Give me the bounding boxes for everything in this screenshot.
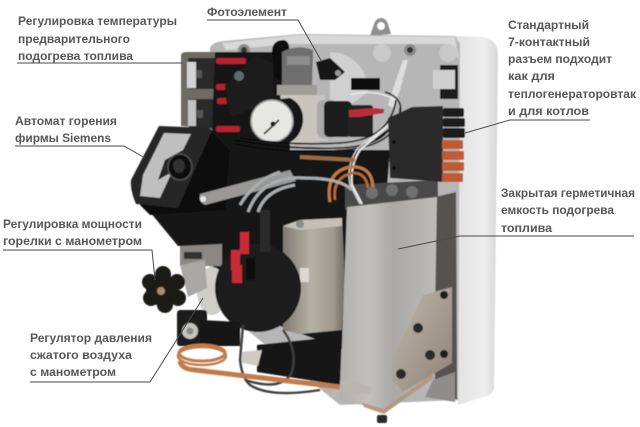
tank foot <box>377 415 387 423</box>
dark gap beside tank <box>435 192 457 400</box>
callout: 7-pin connector: теплогенераторовтак <box>508 87 637 101</box>
solenoid valve <box>225 55 273 117</box>
callout: sealed tank: Закрытая герметичная <box>501 186 635 200</box>
callout: 7-pin connector: как для <box>508 69 555 83</box>
tank bolts <box>366 184 418 199</box>
callout: 7-pin connector: 7-контактный <box>508 35 590 49</box>
upper terminal strip <box>351 78 380 90</box>
callout: sealed tank: топлива <box>501 221 552 235</box>
fuel tank <box>340 184 437 423</box>
left relay bracket <box>181 52 222 130</box>
callout: power regulation: горелки с манометром <box>3 234 142 248</box>
callout: sealed tank <box>398 186 635 249</box>
fuel fitting <box>340 381 372 394</box>
casting rim <box>222 35 459 60</box>
motor <box>283 218 345 334</box>
casting disc <box>330 52 368 120</box>
casting window <box>440 65 458 99</box>
clear tubes <box>240 172 352 212</box>
rear gauge <box>197 267 227 315</box>
tank top shadow <box>345 180 438 210</box>
callout: air pressure regulator <box>30 298 203 382</box>
callout: air pressure regulator: сжатого воздуха <box>30 348 132 362</box>
black base <box>257 336 342 385</box>
photoelement <box>316 58 345 80</box>
adjustment knob <box>142 266 186 313</box>
copper coil <box>178 345 340 387</box>
automat Siemens box <box>131 126 230 215</box>
callout: power regulation <box>3 217 155 280</box>
reset button <box>168 154 192 180</box>
copper pipe fitting <box>300 157 373 202</box>
callout: temperature regulation: предварительного <box>18 32 130 46</box>
device label <box>140 133 191 198</box>
dark mass behind components <box>150 52 390 350</box>
air regulator block <box>177 310 240 346</box>
housing side panel <box>452 36 498 405</box>
relay upper <box>187 58 216 89</box>
red terminals <box>216 58 246 132</box>
callout: air pressure regulator: с манометром <box>30 365 116 379</box>
housing back casting <box>210 34 460 405</box>
callout: temperature regulation <box>17 14 183 63</box>
pressure switch plate <box>215 210 301 332</box>
callout: 7-pin connector: разъем подходит <box>508 52 612 66</box>
pressure regulator <box>277 47 328 145</box>
actuator cylinder <box>317 100 384 138</box>
callout: sealed tank: емкость подогрева <box>501 203 614 217</box>
callout: photoelement: Фотоэлемент <box>207 5 287 19</box>
pressure gauge <box>251 98 303 144</box>
callout: air pressure regulator: Регулятор давления <box>30 331 152 345</box>
insulated gray pipe <box>200 170 296 205</box>
callout: 7-pin connector <box>465 18 637 133</box>
valve stem <box>180 260 207 297</box>
burner photograph <box>131 18 498 423</box>
connector block <box>388 106 465 182</box>
callout: temperature regulation: подогрева топлива <box>18 49 133 63</box>
mounting plate <box>392 287 452 392</box>
callout: photoelement <box>207 5 322 62</box>
cables <box>240 325 320 393</box>
callout: Siemens automat: Автомат горения <box>15 114 117 128</box>
callout: power regulation: Регулировка мощности <box>3 217 142 231</box>
hanging lug <box>370 18 391 36</box>
callout: Siemens automat <box>15 114 145 158</box>
wiring harness <box>235 92 401 204</box>
callout: temperature regulation: Регулировка температуры <box>18 14 177 28</box>
mounting bosses <box>238 44 457 62</box>
callout: 7-pin connector: и для котлов <box>508 104 589 118</box>
lower bracket <box>180 244 222 266</box>
callout: 7-pin connector: Стандартный <box>508 18 589 32</box>
relay lower <box>188 99 217 128</box>
red spade connectors <box>231 232 249 283</box>
callout: Siemens automat: фирмы Siemens <box>15 131 111 145</box>
